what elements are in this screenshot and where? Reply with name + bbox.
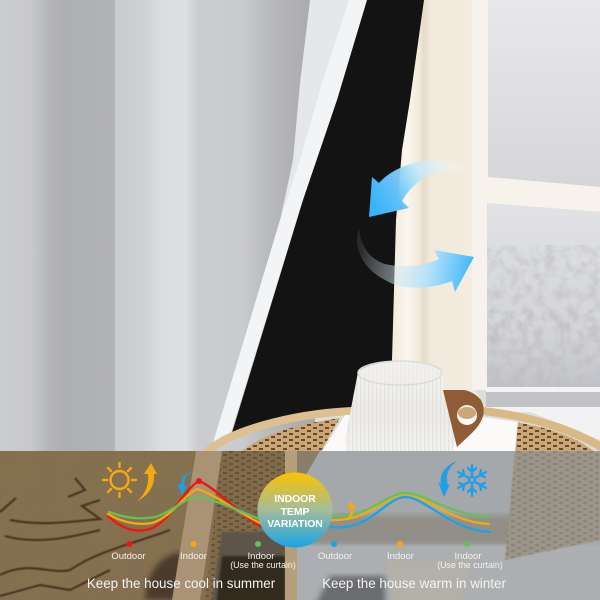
chart: winter temperature curves — [330, 493, 490, 532]
icon: summer up arrow — [137, 463, 157, 501]
legend: winter labels: Indoor — [387, 551, 414, 562]
legend: summer labels: Indoor — [248, 551, 274, 562]
winter scene floor tone — [297, 515, 520, 545]
panel: summer band — [0, 451, 297, 600]
table leg — [390, 575, 462, 600]
gap between bands — [285, 451, 297, 600]
cup wooden handle — [443, 390, 484, 447]
cup rim — [358, 361, 442, 385]
legend: winter labels: (Use the curtain) — [437, 560, 503, 570]
window trim — [385, 0, 475, 452]
white book on table — [322, 415, 518, 452]
left curtain fold — [0, 0, 115, 452]
icon: snowflake — [458, 465, 486, 496]
table rim left — [205, 411, 352, 454]
legend: summer labels: (Use the curtain) — [230, 560, 296, 570]
cup handle top highlight — [443, 384, 480, 399]
legend: summer dots — [126, 541, 261, 547]
peak marker — [196, 478, 202, 484]
legend: summer labels: Outdoor — [111, 551, 146, 562]
lower table shadow — [212, 532, 285, 600]
icon: sun — [103, 463, 136, 497]
icon: outgoing air arrow — [357, 228, 474, 292]
upper window pane — [488, 0, 600, 187]
heading: summer caption: Keep the house cool in summer — [87, 576, 276, 591]
panel: rattan table — [205, 411, 600, 454]
icon: winter small up arrow — [345, 501, 356, 520]
legend: summer labels: Indoor — [180, 551, 207, 562]
dark table floor — [216, 556, 285, 600]
ground cracks — [0, 478, 170, 596]
legend: winter labels: Outdoor — [318, 551, 352, 562]
icon: incoming air arrow — [369, 160, 470, 217]
heading: winter caption: Keep the house warm in winter — [322, 576, 506, 591]
badge: indoor temp variation: TEMP — [281, 507, 309, 518]
table rim right — [483, 411, 600, 449]
right curtain fold — [115, 0, 315, 452]
legend: winter labels: Indoor — [455, 551, 481, 562]
badge: indoor temp variation: INDOOR — [274, 494, 316, 505]
table caned surface left — [240, 418, 340, 453]
chart: summer temperature curves — [108, 478, 262, 531]
snowy railing and ground — [486, 387, 600, 440]
cup handle hole view — [458, 407, 476, 419]
legend: winter dots — [331, 541, 470, 547]
window sash — [472, 0, 600, 390]
icon: summer blue arrow — [177, 472, 193, 495]
caned table seen through band — [505, 451, 600, 560]
curtain white liner — [213, 0, 367, 443]
lower window pane with snowy trees — [487, 203, 600, 388]
light ruler post — [172, 451, 222, 600]
black curtain panel — [231, 0, 424, 436]
book corner — [297, 451, 320, 474]
icon: winter down arrow — [438, 461, 457, 497]
icon: ribbed glass cup — [345, 361, 484, 452]
dark shadow patch — [145, 552, 182, 600]
curtain liner outer edge — [213, 0, 367, 443]
legend: summer labels — [111, 551, 296, 570]
dark floor corner — [315, 576, 385, 600]
table seen through summer band — [205, 451, 291, 600]
badge: indoor temp variation: VARIATION — [267, 519, 323, 530]
badge: indoor temp variation — [258, 472, 332, 548]
panel: winter band — [297, 451, 600, 600]
legend: winter labels — [318, 551, 503, 570]
table caned surface right — [500, 420, 596, 453]
panel: room photo background — [0, 0, 600, 452]
lighter floor — [298, 544, 506, 548]
